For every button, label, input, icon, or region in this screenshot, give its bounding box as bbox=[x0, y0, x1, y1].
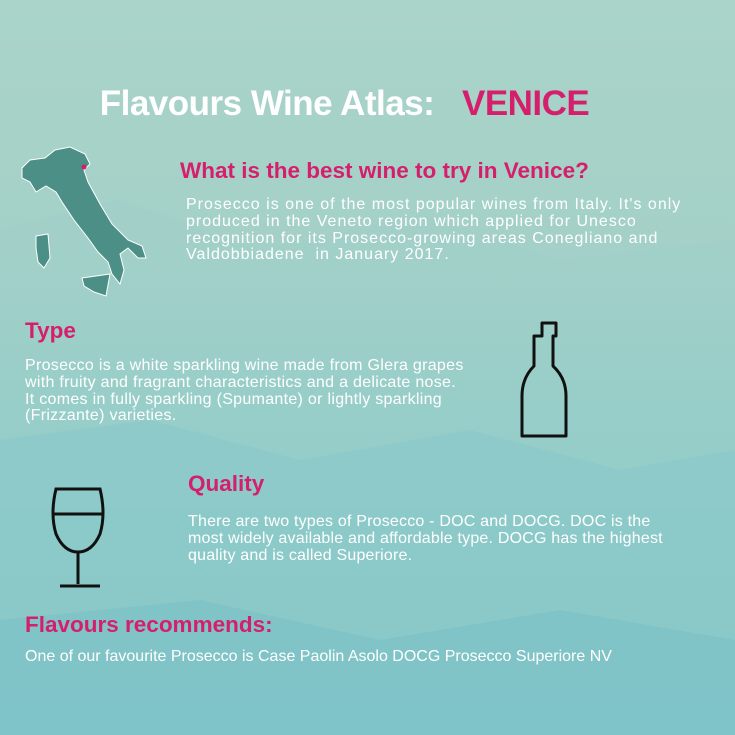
text: intro: recognition for its Prosecco-growing areas Conegliano and bbox=[186, 230, 658, 247]
icon: bottle bbox=[520, 322, 568, 438]
heading: quality: Quality bbox=[188, 471, 264, 496]
text: type: Prosecco is a white sparkling wine made from Glera grapes bbox=[25, 357, 464, 374]
icon: italy map bbox=[22, 146, 147, 297]
text: quality bbox=[188, 513, 663, 564]
text: type: It comes in fully sparkling (Spumante) or lightly sparkling bbox=[25, 391, 442, 408]
text: quality: quality and is called Superiore. bbox=[188, 547, 412, 564]
heading: best wine: What is the best wine to try in Venice? bbox=[180, 158, 589, 183]
heading: type: Type bbox=[25, 318, 76, 343]
text: intro: produced in the Veneto region which applied for Unesco bbox=[186, 213, 637, 230]
text: quality: There are two types of Prosecco - DOC and DOCG. DOC is the bbox=[188, 513, 650, 530]
text: intro bbox=[186, 196, 681, 263]
heading: recommends: Flavours recommends: bbox=[25, 612, 273, 637]
text: type: with fruity and fragrant characteristics and a delicate nose. bbox=[25, 374, 456, 391]
text: intro: Prosecco is one of the most popular wines from Italy. It's only bbox=[186, 196, 681, 213]
text: type: (Frizzante) varieties. bbox=[25, 407, 177, 424]
text: quality: most widely available and affordable type. DOCG has the highest bbox=[188, 530, 663, 547]
title: Flavours Wine Atlas: VENICE bbox=[100, 84, 589, 123]
icon: wine glass bbox=[52, 488, 104, 588]
text: intro: Valdobbiadene in January 2017. bbox=[186, 246, 450, 263]
text: recommendation: One of our favourite Prosecco is Case Paolin Asolo DOCG Prosecco Superiore NV bbox=[25, 648, 612, 665]
text: type bbox=[25, 357, 464, 424]
